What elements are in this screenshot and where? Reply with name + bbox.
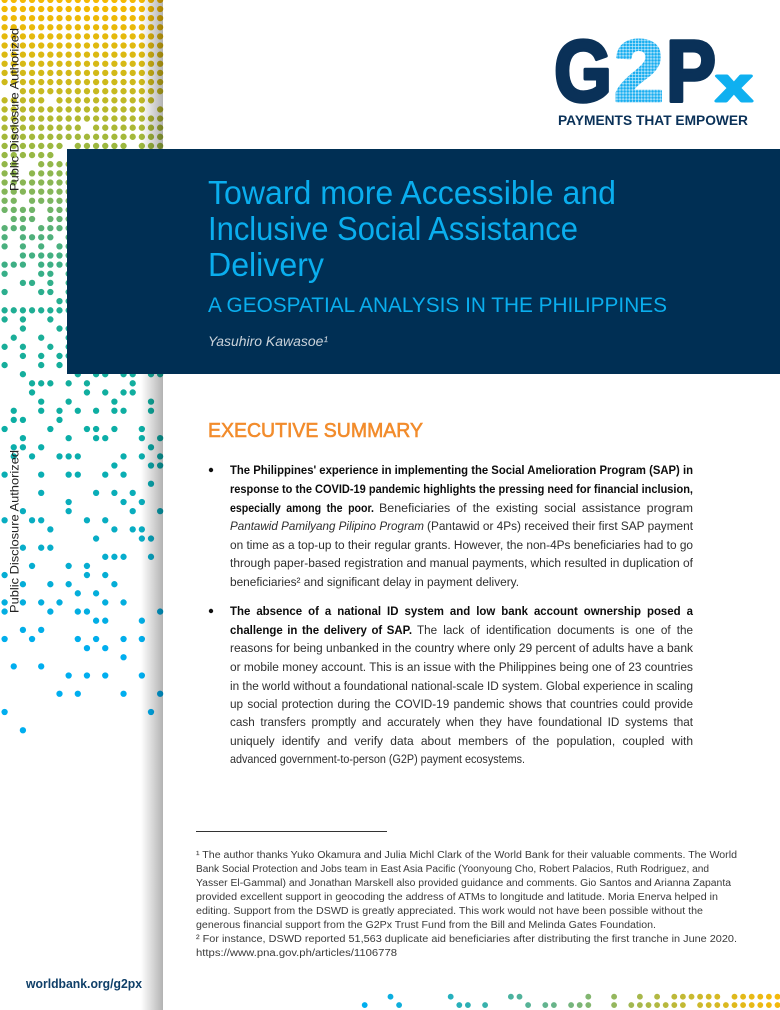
bullet two: The lack of identification documents is one of the [417, 623, 693, 637]
logo: G2Px payments that empower: x [716, 58, 752, 111]
footnotes: editing. Support from the DSWD is greatly appreciated. This work would not have been possible without the [196, 906, 703, 917]
logo: G2Px payments that empower: PAYMENTS THAT EMPOWER [558, 113, 748, 128]
logo: G2Px payments that empower: G [554, 23, 612, 120]
bullet one: response to the COVID-19 pandemic highlights the pressing need for financial inclusion, [230, 482, 693, 496]
panel: title banner [67, 149, 780, 374]
subtitle: A GEOSPATIAL ANALYSIS IN THE PHILIPPINES [208, 294, 667, 317]
author: Yasuhiro Kawasoe¹ [208, 334, 329, 349]
footnotes: provided excellent support in geocoding the address of ATMs to longitude and latitude. Moria Enerva helped in [196, 892, 718, 903]
page fold shadow [141, 0, 163, 1010]
bullet one [209, 463, 694, 589]
bullet one: (Pantawid or 4Ps) received their first SAP payment [427, 519, 694, 533]
footnotes: https://www.pna.gov.ph/articles/1106778 [196, 948, 397, 959]
decorative dot field: left edge [5, 0, 160, 730]
title: Delivery [208, 246, 324, 283]
bullet two: The absence of a national ID system and low bank account ownership posed a [230, 604, 693, 618]
title [208, 174, 616, 283]
bullet one: Beneficiaries of the existing social assistance program [379, 501, 693, 515]
footnotes: Bank Social Protection and Jobs team in East Asia Pacific (Yoonyoung Cho, Robert Palacios, Ruth Rodriguez, and [196, 864, 709, 875]
footnotes [196, 850, 737, 959]
stamp: public disclosure authorized, top: Public Disclosure Authorized [8, 28, 22, 191]
logo: G2Px payments that empower: P [666, 23, 716, 120]
bullet two [209, 604, 694, 766]
bullet two: reasons for being unbanked in the country where only 29 percent of adults have a bank [230, 641, 694, 655]
title: Toward more Accessible and [208, 174, 616, 211]
decorative dot field: bottom edge [365, 997, 778, 1005]
logo: G2Px payments that empower [554, 23, 752, 128]
stamp: public disclosure authorized, bottom: Public Disclosure Authorized [8, 450, 22, 613]
logo: G2Px payments that empower: 2 [614, 23, 664, 120]
title: Inclusive Social Assistance [208, 210, 578, 247]
bullet two: or mobile money account. This is an issue with the Philippines being one of 23 countries [230, 660, 693, 674]
footnotes: ² For instance, DSWD reported 51,563 duplicate aid beneficiaries after distributing the first tranche in June 2020. [196, 934, 737, 945]
bullet one: Pantawid Pamilyang Pilipino Program [230, 519, 424, 533]
bullet two: advanced government-to-person (G2P) payment ecosystems. [230, 752, 525, 766]
heading: executive summary: EXECUTIVE SUMMARY [208, 420, 423, 442]
bullet one: beneficiaries² and significant delay in payment delivery. [230, 575, 519, 589]
bullet two: challenge in the delivery of SAP. [230, 623, 412, 637]
bullet two: cash transfers promptly and accurately when they have foundational ID systems that [230, 715, 694, 729]
bullet one: especially among the poor. [230, 501, 374, 515]
bullet one: on time as a top-up to their regular grants. However, the non-4Ps beneficiaries had to go [230, 538, 693, 552]
footnotes: ¹ The author thanks Yuko Okamura and Julia Michl Clark of the World Bank for their valuable comments. The World [196, 850, 737, 861]
bullet two: up social protection during the COVID-19 pandemic shows that countries could provide [230, 697, 693, 711]
bullet two: in the world without a foundational national-scale ID system. Global experience in scaling [230, 679, 693, 693]
bullet one: through paper-based registration and manual payments, which resulted in duplication of [230, 556, 694, 570]
footnotes: generous financial support from the G2Px Trust Fund from the Bill and Melinda Gates Foundation. [196, 920, 656, 931]
website link: worldbank.org/g2px [25, 977, 142, 991]
footnotes: Yasser El-Gammal) and Jonathan Marskell also provided guidance and comments. Gio Santos and Arianna Zapanta [196, 878, 731, 889]
bullet one: The Philippines' experience in implementing the Social Amelioration Program (SAP) in [230, 463, 693, 477]
bullet two: uniquely identify and verify data about members of the population, coupled with [230, 734, 693, 748]
